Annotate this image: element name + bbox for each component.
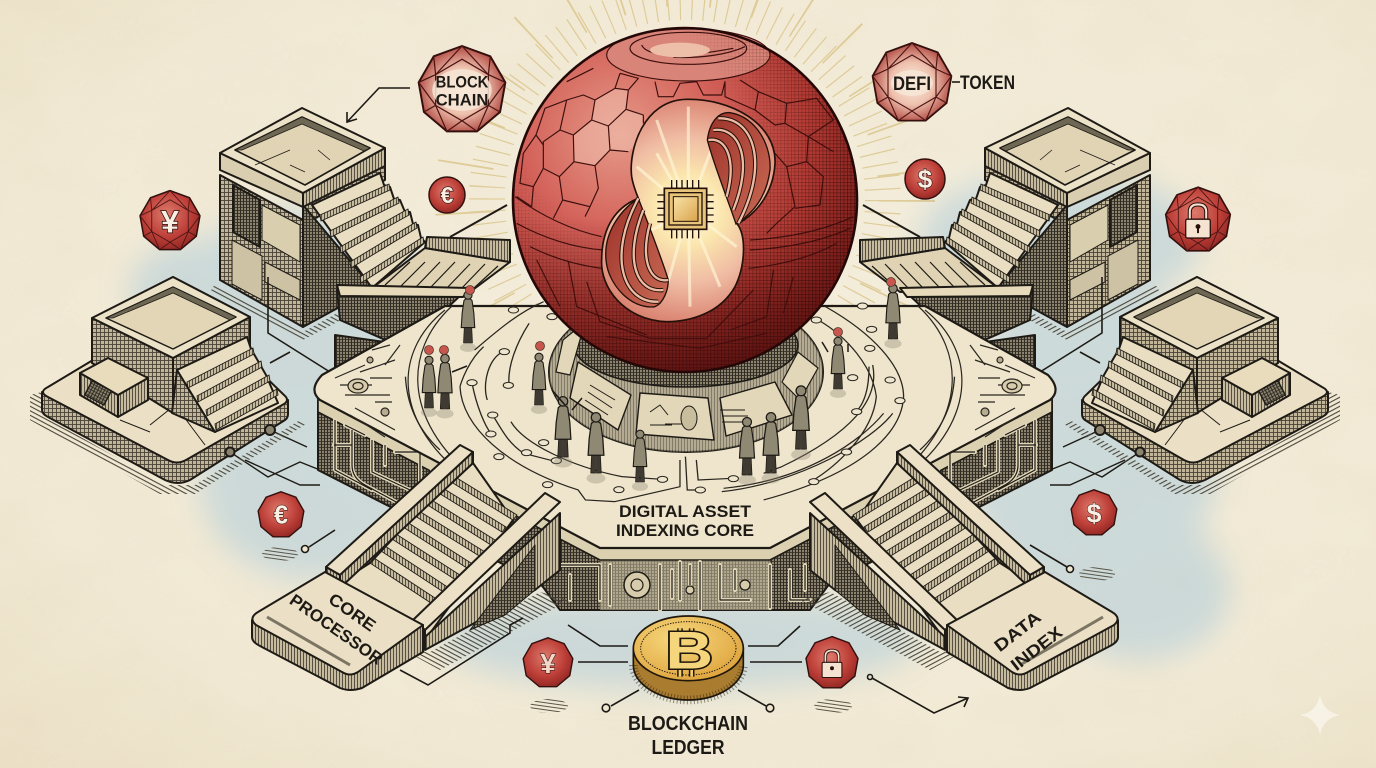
watercolor wash — [130, 170, 1230, 690]
label: blockchain ledger — [628, 713, 748, 759]
platform side walls with circuitry — [318, 398, 1052, 610]
central red sphere — [513, 28, 857, 372]
gem: defi token — [873, 43, 951, 121]
gem: euro lower left — [258, 492, 304, 537]
hatched shadows under gems — [262, 547, 1115, 713]
bitcoin coin — [633, 616, 743, 700]
bitcoin coin: B — [666, 621, 713, 680]
coin: euro upper left: € — [441, 182, 454, 208]
gem: yen upper left — [140, 191, 200, 250]
label: digital asset indexing core: DIGITAL ASSET — [619, 502, 752, 521]
coin: euro upper left — [429, 177, 465, 213]
platform corner circuits — [335, 306, 1035, 486]
gem: block chain: BLOCK — [436, 72, 489, 91]
gem: defi token: DEFI — [893, 74, 931, 95]
label: digital asset indexing core — [616, 502, 754, 540]
label: core processor: PROCESSOR — [286, 590, 386, 669]
coin: dollar upper right: $ — [918, 164, 933, 194]
gem: yen upper left: ¥ — [161, 203, 179, 239]
label: data index: DATA — [990, 608, 1045, 656]
coin: dollar upper right — [905, 159, 945, 199]
gem: dollar lower right — [1071, 490, 1117, 535]
platform top surface — [314, 306, 1056, 548]
pedestal with display panels — [549, 292, 823, 452]
building: front-left block — [30, 277, 306, 494]
label: data index: INDEX — [1007, 622, 1067, 675]
label: data index — [990, 608, 1067, 675]
sparkle watermark — [1300, 695, 1340, 735]
building: front-right block — [1064, 277, 1340, 494]
label: digital asset indexing core: INDEXING CORE — [616, 521, 754, 540]
gem: yen lower: ¥ — [540, 648, 556, 679]
arrow: block chain to tower — [347, 88, 410, 122]
label: blockchain ledger: LEDGER — [652, 737, 725, 759]
coin connector lines — [302, 530, 1074, 712]
sun rays behind sphere — [463, 0, 907, 422]
right staircase and Data Index landing — [800, 445, 1118, 690]
gem: lock lower — [806, 637, 858, 688]
building: back-left tower with stairs — [210, 108, 510, 485]
label: blockchain ledger: BLOCKCHAIN — [628, 713, 748, 735]
gem: yen lower — [523, 638, 573, 687]
arrow: to data index — [868, 674, 968, 713]
people around the core — [421, 278, 902, 491]
sphere surface details — [515, 29, 853, 348]
left staircase and Core Processor landing — [252, 445, 570, 690]
infinity emblem with chip — [602, 99, 775, 322]
gem: lock upper right — [1166, 187, 1230, 251]
label: token: TOKEN — [960, 73, 1015, 94]
label: core processor: CORE — [325, 590, 379, 635]
platform circuit traces — [405, 302, 954, 502]
gem: block chain: CHAIN — [436, 90, 488, 109]
gem: dollar lower right: $ — [1087, 498, 1102, 528]
building: back-right tower with stairs — [860, 108, 1160, 485]
gem: block chain — [419, 46, 505, 131]
gem: euro lower left: € — [274, 502, 288, 530]
